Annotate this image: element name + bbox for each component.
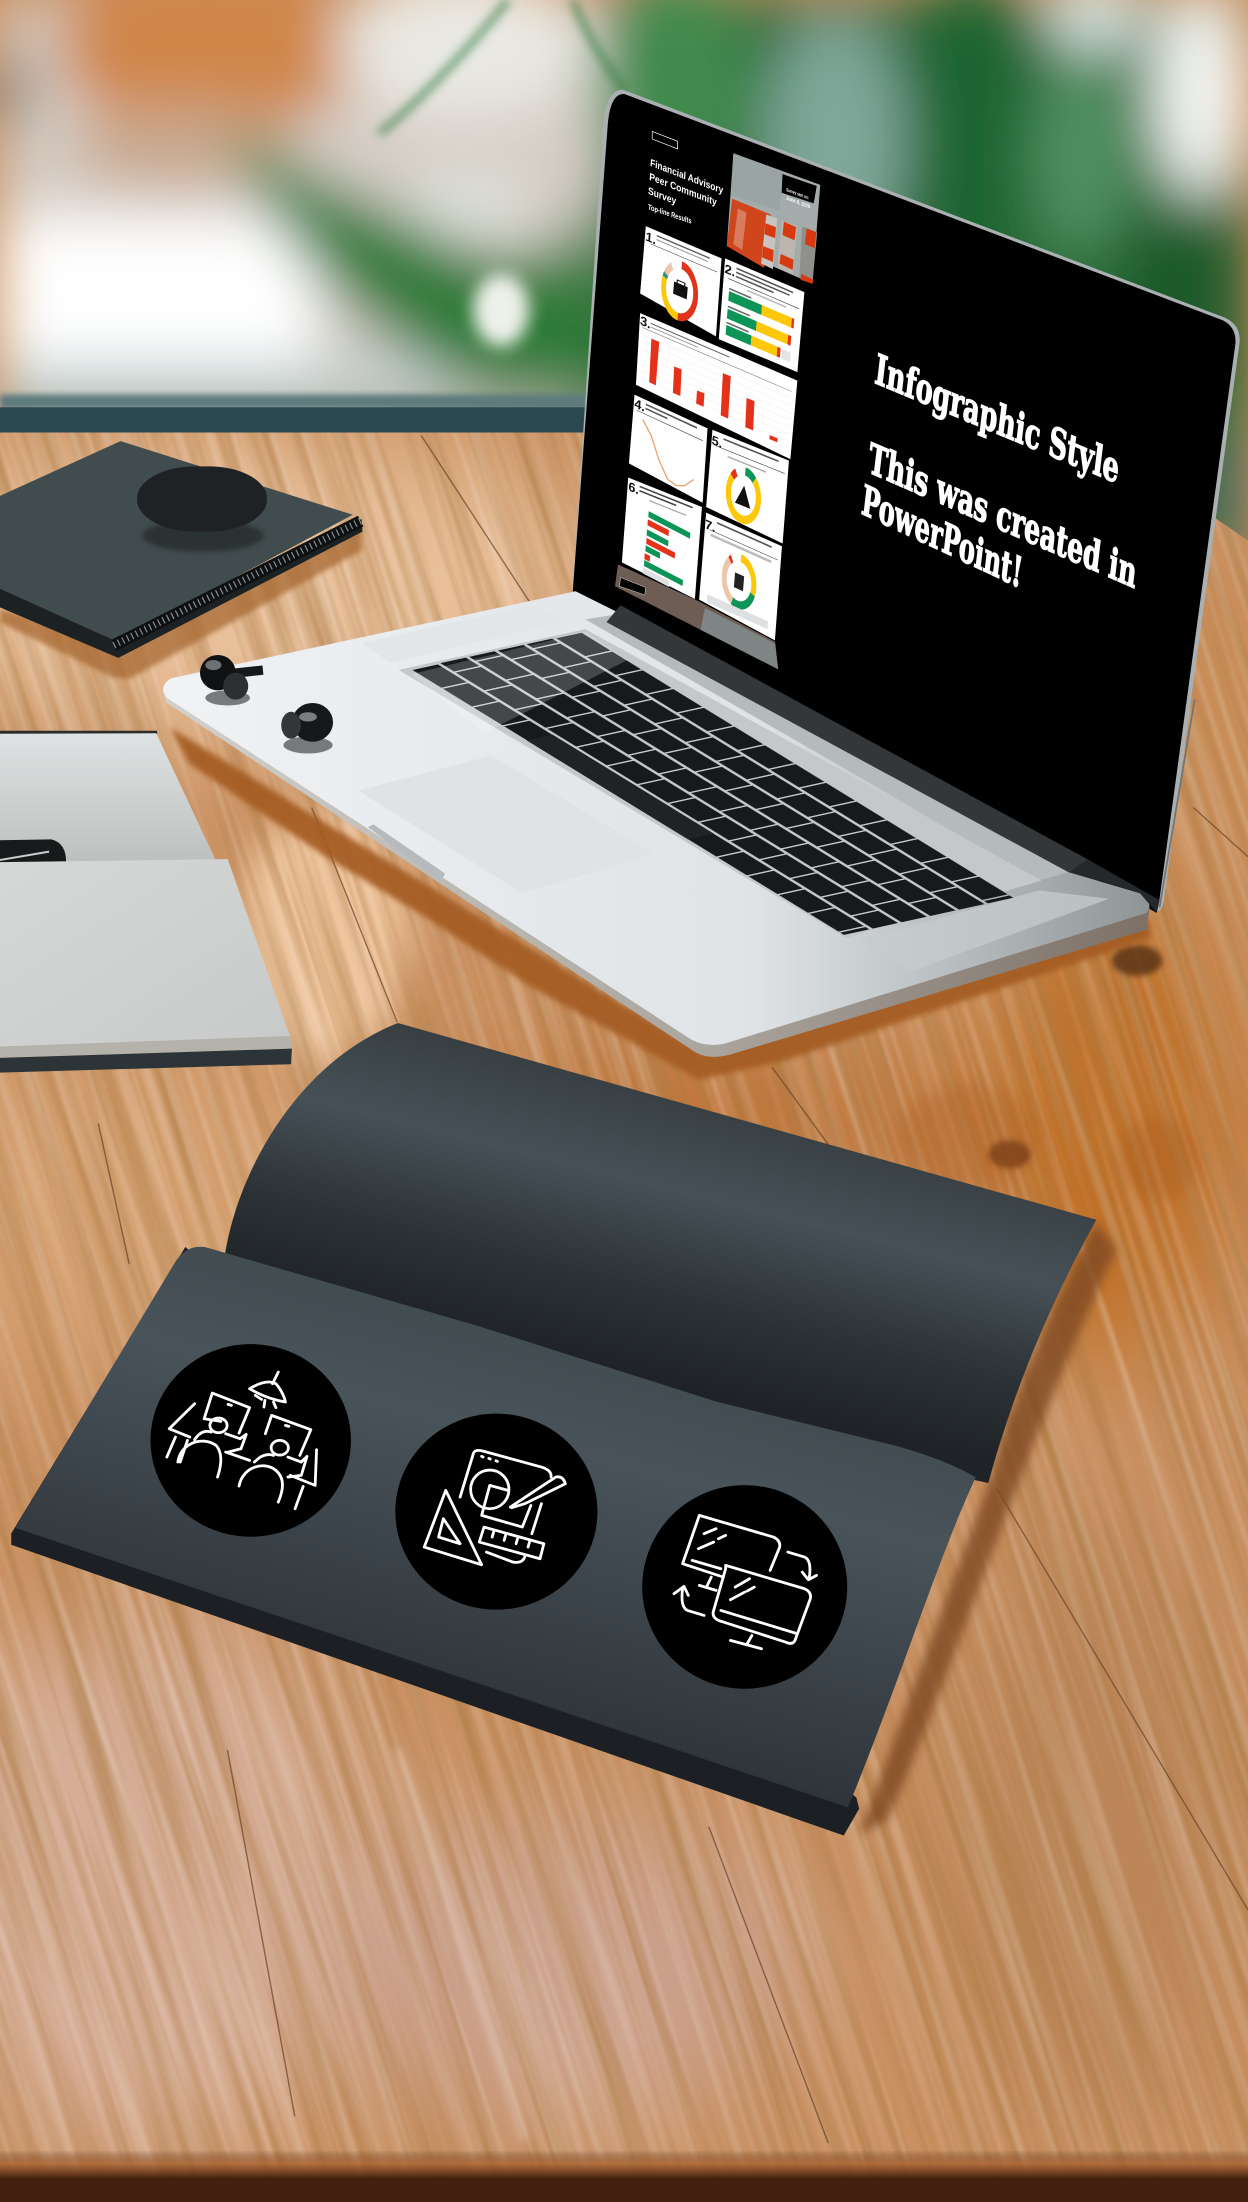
- black open booklet: [11, 1023, 1116, 1835]
- icon: building: [734, 572, 744, 591]
- hinge: [606, 605, 1088, 872]
- panel 5: donut: [706, 430, 789, 543]
- front notch: [368, 824, 445, 882]
- panel 2: stacked bars: [719, 258, 804, 372]
- panel 3: red bar chart: [636, 313, 797, 459]
- palm rest left: [361, 605, 569, 663]
- panel 6: horizontal bars: 6.: [628, 479, 640, 497]
- icon: briefcase: [673, 279, 688, 299]
- shadow under laptop: [170, 727, 1151, 1080]
- mini footer photo strip: [615, 564, 778, 669]
- survey date: Survey sent on:: [786, 187, 809, 202]
- trackpad: [358, 756, 654, 893]
- booklet back page: [225, 1023, 1096, 1483]
- booklet front page: [15, 1247, 976, 1807]
- panel 5: donut: 5.: [711, 432, 723, 451]
- black spiral notebook: [0, 441, 362, 679]
- icon disc: syncing monitors: [642, 1485, 847, 1689]
- booklet shadow: [859, 1222, 1116, 1834]
- panel 1: donut: [640, 226, 722, 336]
- mini title: Top-line Results: [648, 202, 692, 226]
- panel 7: donut: 7.: [704, 517, 716, 535]
- keyboard well: [399, 629, 1042, 938]
- mini title: [648, 158, 724, 226]
- earbud case: [137, 466, 267, 552]
- screen headline: PowerPoint!: PowerPoint!: [859, 476, 1025, 599]
- pen: [0, 839, 66, 864]
- palm rest right: [859, 890, 1109, 972]
- table front edge: [0, 2150, 1248, 2202]
- window sill: [0, 395, 590, 433]
- mini title: Financial Advisory: [650, 158, 724, 197]
- laptop deck: [163, 591, 1149, 1045]
- icon: warning cone: [735, 483, 752, 509]
- earbuds: [200, 655, 333, 753]
- silver band behind keys: [585, 614, 1068, 881]
- laptop screen lid: [573, 90, 1240, 913]
- mini header rectangle: [652, 131, 678, 149]
- laptop base side: [163, 688, 1150, 1057]
- booklet bottom edge: [11, 1247, 859, 1835]
- panel 3: red bar chart: 3.: [640, 313, 651, 332]
- blurred background: window and plants: [0, 0, 1248, 562]
- mini note box: [707, 594, 768, 629]
- panel 4: line chart: 4.: [634, 396, 646, 415]
- icon disc: people at desks: [150, 1344, 351, 1537]
- panel 6: horizontal bars: [622, 477, 702, 599]
- table knots: [898, 945, 1200, 1201]
- laptop: [163, 90, 1240, 1080]
- open white notebook with pen: [0, 731, 292, 1073]
- mini title: Peer Community: [649, 172, 717, 209]
- mini photo of traffic cones: [727, 153, 820, 284]
- panel 4: line chart: [629, 395, 708, 503]
- panel 7: donut: [699, 513, 782, 640]
- icon disc: design tools: [395, 1414, 597, 1610]
- mini title: Survey: [648, 186, 677, 208]
- mini infographic on laptop screen: [615, 131, 820, 669]
- survey date: June 8, 2020: [786, 196, 810, 210]
- survey date: [786, 187, 810, 210]
- keyboard keys: [410, 632, 1015, 935]
- key reflections: [411, 632, 628, 733]
- panel 2: stacked bars: 2.: [724, 261, 736, 280]
- pale sunlit wood: [236, 807, 410, 1060]
- lid edge right of hinge: [1068, 859, 1160, 913]
- panel 1: donut: 1.: [645, 229, 657, 247]
